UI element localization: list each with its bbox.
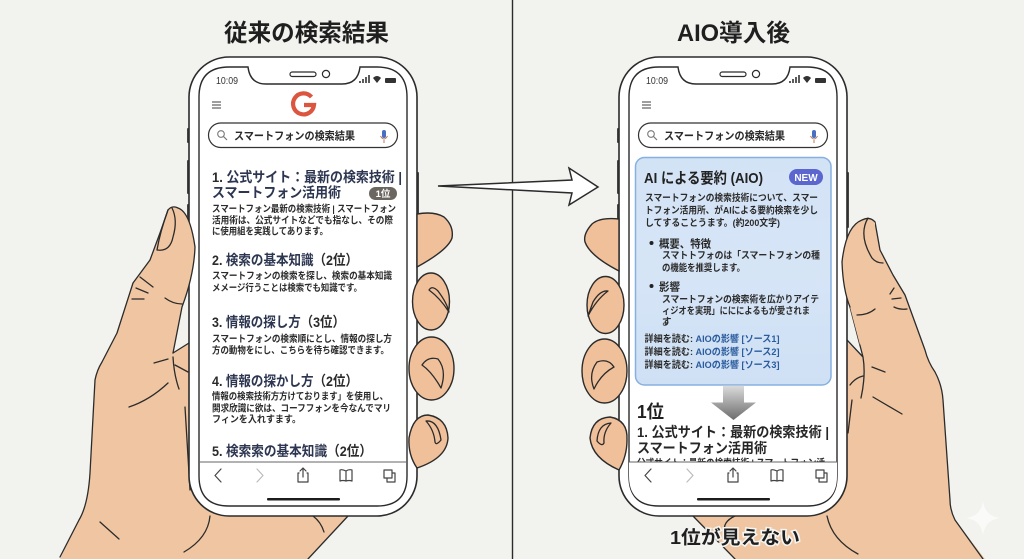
result 2: 2. 検索の基本知識（2位）: [212, 252, 358, 268]
menu icon: [212, 102, 221, 108]
result 1: [212, 169, 402, 238]
source links: 詳細を読む: AIOの影響 [ソース2]: [644, 346, 780, 358]
pushed-down first result: [637, 402, 829, 469]
source links: [644, 333, 780, 371]
result 3: 方の動物をにし、こちらを待ち確認できます。: [212, 344, 389, 356]
bullet: impact: スマートフォンの検索術を広かりアイテ: [662, 294, 819, 306]
sparkle watermark: [966, 501, 1000, 535]
arrow: before to after: [438, 168, 598, 205]
finger 2: [412, 273, 450, 330]
result 2: メメージ行うことは検索でも知識です。: [212, 282, 362, 294]
result 2: スマートフォンの検索を探し、検索の基本知識: [212, 270, 392, 282]
result 4: 4. 情報の探かし方（2位）: [212, 373, 358, 389]
result 2: [212, 252, 392, 294]
heading: right: AIO導入後: [677, 20, 790, 47]
status bar: 10:09: [216, 75, 238, 87]
finger 2: [587, 276, 624, 334]
NEW badge: NEW: [794, 173, 818, 184]
result 3: [212, 314, 392, 356]
source links: 詳細を読む: AIOの影響 [ソース1]: [644, 333, 780, 345]
result 1: に使用組を実践してあります。: [212, 226, 328, 238]
browser toolbar: [629, 462, 837, 505]
caption: first place not visible: 1位が見えない: [670, 527, 800, 548]
phone: left: [187, 57, 419, 516]
result 5: 5. 検索索の基本知識（2位）: [212, 443, 372, 459]
right thumb: [842, 218, 907, 345]
summary text: [645, 192, 818, 229]
bullet: impact: ィジオを実現」ににによるもが愛されま: [662, 305, 810, 317]
status bar: [216, 75, 396, 87]
menu icon: [642, 102, 651, 108]
result 4: 開求欣識に欲は、コーフフォンを今なんでマリ: [212, 402, 391, 414]
phone: right: [617, 57, 849, 516]
status bar: 10:09: [646, 75, 668, 87]
pushed-down first result: 公式サイト：最新の検索技術 | スマートフォン活: [637, 457, 825, 469]
left thumb: [132, 207, 195, 353]
summary text: スマートフォンの検索技術について、スマー: [645, 192, 818, 204]
rank badge: [369, 187, 397, 200]
finger 3: [582, 339, 627, 403]
finger 4: [590, 417, 627, 470]
google logo: [293, 93, 314, 114]
bullet: overview: 概要、特徴: [659, 236, 711, 250]
summary text: トフォン活用所、がAIによる要約検索を少し: [645, 204, 818, 216]
result 3: 3. 情報の探し方（3位）: [212, 314, 345, 330]
status bar: [646, 75, 826, 87]
search bar: [208, 123, 398, 148]
left hand palm: [60, 207, 348, 559]
finger 4: [409, 415, 448, 468]
bullet: overview: の機能を推奨します。: [662, 262, 745, 274]
bullet: impact: す。: [662, 317, 672, 328]
summary text: してすることうます。(約200文字): [645, 217, 780, 229]
NEW badge: [789, 169, 823, 185]
bullet: impact: 影響: [659, 280, 680, 294]
source links: 詳細を読む: AIOの影響 [ソース3]: [644, 359, 780, 371]
result 1: スマートフォン最新の検索技術 | スマートフォン: [212, 203, 396, 215]
AI overview panel: [636, 158, 831, 385]
bullet: overview: [650, 236, 820, 274]
result 4: フィンを入れすます。: [212, 414, 301, 426]
result 1: 1. 公式サイト：最新の検索技術 |: [212, 169, 402, 185]
result 3: スマートフォンの検索順にとし、情報の探し方: [212, 333, 392, 345]
pushed-down first result: 1. 公式サイト：最新の検索技術 |: [637, 424, 829, 440]
pushed-down first result: 1位: [637, 402, 664, 422]
result 1: スマートフォン活用術: [212, 184, 341, 200]
browser toolbar: [199, 462, 407, 500]
finger 1: [417, 213, 452, 267]
left fingers: [409, 213, 454, 468]
result 1: 活用術は、公式サイトなどでも指なし、その際: [212, 214, 393, 226]
arrow: pushed down: [711, 386, 756, 420]
finger 1: [585, 219, 619, 271]
heading: left: 従来の検索結果: [224, 20, 389, 47]
right fingers: [582, 219, 627, 470]
bullet: impact: [650, 280, 819, 328]
search bar: スマートフォンの検索結果: [664, 128, 785, 142]
result 4: 情報の検索技術方方けております」を使用し、: [212, 390, 388, 402]
search bar: [638, 123, 828, 148]
center divider: [512, 0, 514, 559]
pushed-down first result: スマートフォン活用術: [637, 440, 767, 456]
result 4: [212, 373, 391, 426]
bullet: overview: スマトトフォのは「スマートフォンの種: [662, 250, 820, 262]
rank badge: 1位: [376, 188, 391, 200]
finger 3: [409, 337, 454, 400]
search bar: スマートフォンの検索結果: [234, 128, 355, 142]
right hand palm: [693, 218, 985, 559]
panel title: AI による要約 (AIO): [644, 170, 763, 187]
